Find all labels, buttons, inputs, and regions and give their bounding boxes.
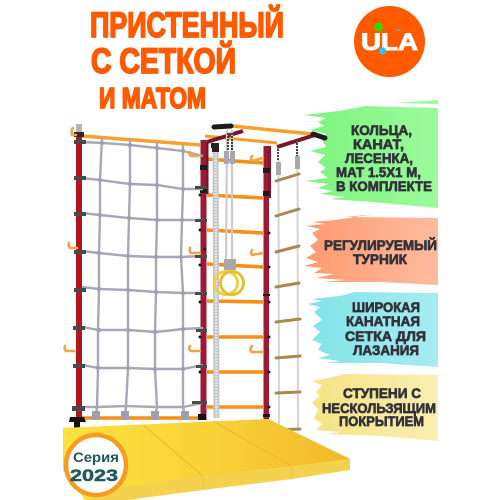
top and bottom orange bars (82, 136, 200, 145)
badge: series 2023: 2023 (70, 466, 118, 485)
clamps (72, 132, 207, 420)
panel: included accessories: В КОМПЛЕКТЕ (336, 178, 432, 194)
title: ПРИСТЕННЫЙ (90, 5, 284, 45)
left post (76, 124, 82, 138)
panel: wide rope net: СЕТКА ДЛЯ (345, 328, 426, 344)
panel: included accessories: КОЛЬЦА, (351, 122, 412, 138)
badge: series 2023: Серия (73, 449, 119, 465)
panel: adjustable pull-up bar: ТУРНИК (353, 251, 407, 267)
lower top bar (205, 136, 277, 143)
title (90, 5, 284, 115)
panel: non-slip steps: НЕСКОЛЬЗЯЩИМ (322, 400, 436, 416)
panel: included accessories (304, 100, 438, 208)
climbing rope (212, 148, 219, 418)
panel: wide rope net: ЛАЗАНИЯ (353, 342, 419, 358)
wall post left of bars (200, 140, 206, 420)
panel: adjustable pull-up bar (304, 214, 438, 285)
logo: ULA (354, 6, 425, 77)
pull-up bar (207, 126, 325, 148)
panel: non-slip steps: СТУПЕНИ С (343, 385, 421, 401)
badge: series 2023 (66, 435, 126, 495)
logo: ULA: ULA (361, 29, 418, 56)
rope ladder (276, 140, 300, 431)
panel: included accessories: МАТ 1.5Х1 М, (336, 164, 421, 180)
wall bars frame (198, 136, 277, 420)
panel: non-slip steps: ПОКРЫТИЕМ (339, 413, 424, 429)
ropes (82, 138, 203, 416)
orange rungs (207, 159, 263, 407)
floor joint (69, 417, 86, 428)
title: С СЕТКОЙ (91, 41, 236, 81)
hooks (65, 128, 263, 352)
panel: adjustable pull-up bar: РЕГУЛИРУЕМЫЙ (324, 236, 437, 253)
title: И МАТОМ (99, 83, 206, 115)
panel: wide rope net: КАНАТНАЯ (346, 313, 420, 329)
panel: included accessories: ЛЕСЕНКА, (345, 150, 413, 166)
panel: wide rope net: ШИРОКАЯ (352, 299, 420, 315)
climbing net (69, 124, 207, 428)
yellow mat (63, 419, 350, 500)
panel: non-slip steps (312, 374, 438, 441)
panel: included accessories: КАНАТ, (353, 136, 404, 152)
gymnastic rings (214, 130, 244, 294)
knots (92, 141, 189, 420)
wall post right of bars (264, 146, 269, 420)
panel: wide rope net (308, 292, 438, 367)
